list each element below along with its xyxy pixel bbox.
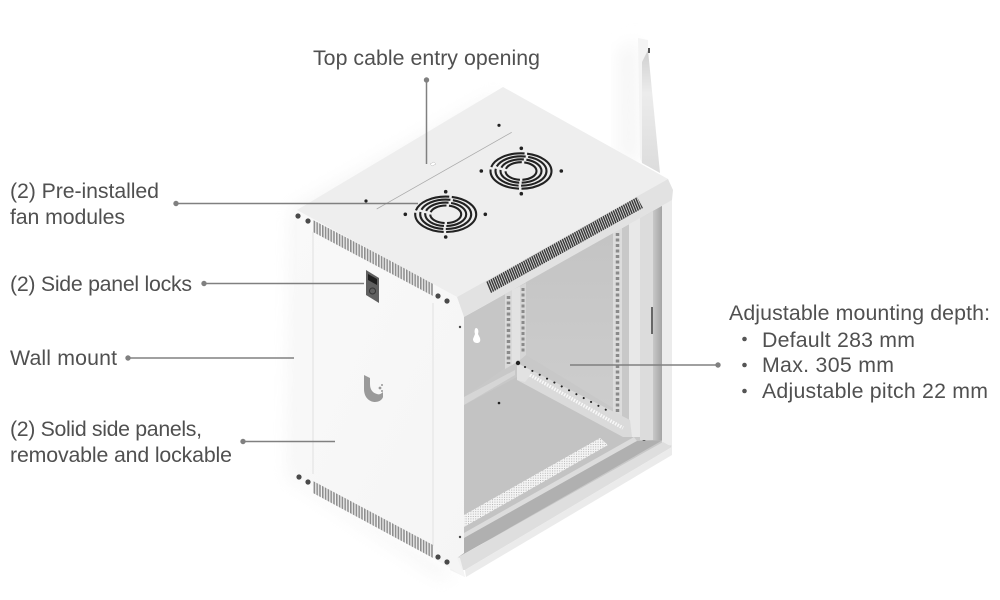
callout: wall mount — [10, 346, 294, 370]
right rail — [613, 226, 622, 431]
back left rails — [505, 283, 526, 369]
callout: side panel locks — [10, 272, 364, 296]
icon: fan module 2 — [480, 146, 563, 196]
callout: solid side panels: (2) Solid side panels, — [10, 417, 202, 441]
callout: fan modules: (2) Pre-installed — [10, 179, 159, 203]
callout: side panel locks: (2) Side panel locks — [10, 272, 192, 296]
front top strip — [457, 179, 673, 317]
callout: wall mount: Wall mount — [10, 346, 117, 370]
callout: fan modules: fan modules — [10, 205, 125, 229]
right door frame — [629, 200, 672, 446]
cabinet — [287, 87, 673, 580]
callout: fan modules — [10, 179, 418, 229]
icon: keyhole mount slot — [473, 328, 480, 343]
panel: solid side panel — [297, 210, 465, 577]
callout: adjustable mounting depth — [570, 301, 990, 403]
icon: fan module 1 — [404, 190, 487, 239]
wall mount bracket — [618, 38, 660, 173]
cross bracket — [516, 361, 632, 437]
base lip — [457, 442, 672, 570]
callout: solid side panels: removable and lockable — [10, 443, 232, 467]
callout: adjustable mounting depth: Adjustable pitch 22 mm — [762, 379, 988, 403]
callout: top cable entry opening: Top cable entry opening — [313, 46, 540, 70]
callout: adjustable mounting depth: Adjustable mounting depth: — [729, 301, 990, 325]
callout: adjustable mounting depth: Max. 305 mm — [762, 353, 894, 377]
icon: brand logo — [364, 375, 383, 402]
side vents — [313, 220, 433, 558]
side screws — [295, 213, 461, 565]
callout: solid side panels — [10, 417, 335, 467]
icon: side panel lock — [366, 270, 379, 303]
callout: adjustable mounting depth: Default 283 mm — [762, 328, 915, 352]
interior — [457, 200, 672, 558]
callout: top cable entry opening — [313, 46, 540, 164]
panel: top — [297, 87, 668, 297]
